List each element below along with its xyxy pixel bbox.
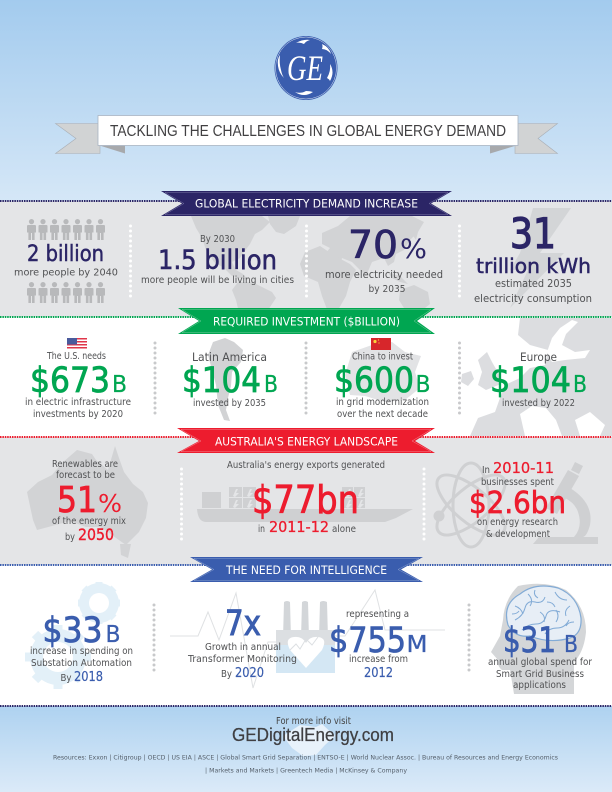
stat: 31B smart grid: annual global spend for (488, 657, 593, 668)
microscope icon (533, 462, 598, 544)
stat: Latin America 104B: B (264, 372, 278, 398)
stat: 70 percent: by 2035 (368, 284, 406, 295)
handshake icon (283, 724, 335, 756)
stat: exports 77bn: $77bn (252, 478, 359, 522)
stat: exports 77bn: alone (332, 524, 356, 535)
stat: renewables 51 percent: % (98, 489, 122, 518)
stat: 33B substation: B (106, 622, 120, 648)
stat: China 600B: B (416, 372, 430, 398)
lightning bolt (510, 208, 571, 308)
stat: China 600B: in grid modernization (336, 397, 429, 408)
section background: electricity demand (0, 201, 612, 317)
banner: Australia's energy landscape: AUSTRALIA'S ENERGY LANDSCAPE (215, 434, 398, 448)
stat: 7x transformer: 7x (225, 604, 261, 644)
stat: research 2.6bn: $2.6bn (469, 486, 566, 521)
stat: renewables 51 percent (52, 459, 126, 544)
stat: China 600B: China to invest (352, 352, 413, 362)
stat: 70 percent: 70 (348, 223, 398, 267)
stat: China 600B: $600 (334, 361, 414, 401)
stat: 31 trillion kWh: electricity consumption (474, 293, 592, 305)
banner: Australia's energy landscape (177, 428, 435, 453)
stat: 7x transformer: By (221, 669, 232, 680)
banner: the need for intelligence: THE NEED FOR INTELLIGENCE (225, 563, 387, 577)
South America map (208, 338, 243, 421)
stat: 31 trillion kWh: estimated 2035 (495, 278, 572, 290)
stat: Europe 104B: invested by 2022 (502, 398, 575, 409)
stat: 33B substation: 2018 (74, 670, 103, 685)
stat: Latin America 104B: invested by 2035 (193, 398, 266, 409)
stat: Europe 104B: $104 (490, 361, 571, 401)
stat: renewables 51 percent: by (65, 532, 75, 543)
section background: Australia (0, 437, 612, 565)
stat: 2 billion: 2 billion (27, 242, 104, 267)
Australia map (27, 446, 148, 558)
stat: 2 billion (14, 242, 118, 278)
stat: 33B substation: $33 (42, 611, 102, 651)
stat: 70 percent: % (400, 234, 427, 265)
stat: 755M: representing a (346, 609, 409, 620)
footer call to action (232, 716, 394, 745)
stat: 31B smart grid: $31 (503, 621, 556, 661)
cargo ship (197, 487, 413, 522)
stat: Europe 104B (490, 350, 587, 409)
stat: exports 77bn: Australia's energy exports generated (227, 460, 385, 471)
stat: 33B substation: Substation Automation (31, 658, 132, 669)
GE logo (274, 36, 338, 100)
stat: renewables 51 percent: forecast to be (56, 470, 115, 481)
resources: | Markets and Markets | Greentech Media | McKinsey & Company (205, 768, 407, 774)
stat: renewables 51 percent: of the energy mix (52, 516, 126, 527)
stat: research 2.6bn: 2010-11 (493, 459, 554, 477)
factory icon (276, 601, 335, 673)
banner: global electricity demand (161, 191, 452, 216)
person icons: bottom row (27, 282, 105, 303)
gears icon (25, 582, 120, 689)
section background: investment (0, 317, 612, 437)
resources (53, 754, 558, 774)
stat: Latin America 104B (182, 350, 278, 409)
stat: Latin America 104B: Latin America (192, 350, 267, 364)
stat: 755M: $755 (329, 621, 406, 661)
stat: US 673B (25, 351, 131, 420)
stat: 755M: 2012 (364, 666, 393, 681)
atom icon (428, 463, 514, 547)
resources: Resources: Exxon | Citigroup | OECD | US EIA | ASCE | Global Smart Grid Separation | ENTSO-E | World Nuclear Assoc. | Bureau of Resources and Energy Economics (53, 754, 558, 762)
stat: 31B smart grid: Smart Grid Business (496, 669, 584, 680)
stat: 1.5 billion: By 2030 (200, 234, 235, 245)
stat: 31 trillion kWh: trillion kWh (476, 254, 591, 278)
stat: 31 trillion kWh: 31 (510, 209, 556, 258)
China flag (371, 338, 391, 350)
stat: 7x transformer: Growth in annual (205, 642, 281, 653)
person icons: top row (27, 219, 105, 240)
stat: 755M: M (406, 632, 428, 658)
stat: 1.5 billion: more people will be living in cities (141, 275, 294, 286)
stat: China 600B (334, 352, 430, 420)
stat: 755M: increase from (349, 654, 408, 665)
world map (191, 216, 430, 317)
stat: 7x transformer (187, 604, 297, 681)
stat: 1.5 billion: 1.5 billion (158, 245, 277, 276)
brain and head icon (491, 584, 586, 694)
banner: required investment: REQUIRED INVESTMENT ($BILLION) (213, 314, 400, 328)
stat: 31B smart grid (488, 621, 593, 691)
stat: research 2.6bn: In (482, 465, 490, 476)
stat: research 2.6bn: & development (486, 529, 550, 540)
section background: intelligence (0, 565, 612, 706)
stat: research 2.6bn: on energy research (477, 517, 558, 528)
stat: 31B smart grid: applications (513, 680, 566, 691)
stat: research 2.6bn (469, 459, 566, 540)
stat: 2 billion: more people by 2040 (14, 268, 118, 278)
stat: US 673B: investments by 2020 (33, 409, 123, 420)
stat: US 673B: $673 (30, 361, 110, 401)
stat: 755M (329, 609, 428, 681)
stat: exports 77bn: 2011-12 (269, 518, 329, 536)
stat: Latin America 104B: $104 (182, 361, 261, 401)
stat: exports 77bn (227, 460, 385, 536)
footer background (0, 706, 612, 792)
stat: renewables 51 percent: 2050 (78, 525, 114, 544)
China map (345, 342, 421, 402)
banner: global electricity demand: GLOBAL ELECTRICITY DEMAND INCREASE (195, 196, 418, 210)
stat: Europe 104B: Europe (520, 350, 557, 364)
stat: 70 percent (325, 223, 443, 295)
stat: 33B substation: By (60, 673, 72, 684)
title ribbon: TACKLING THE CHALLENGES IN GLOBAL ENERGY DEMAND (110, 123, 506, 140)
Europe map (461, 318, 612, 436)
footer call to action: For more info visit (276, 716, 351, 727)
stat: 7x transformer: Transformer Monitoring (187, 654, 297, 665)
stat: China 600B: over the next decade (337, 409, 428, 420)
title ribbon (56, 116, 558, 154)
GE logo: GE (287, 48, 323, 88)
stat: 33B substation (30, 611, 133, 685)
banner: required investment (178, 308, 435, 334)
stat: US 673B: B (112, 372, 127, 398)
sky background (0, 0, 612, 201)
stat: 1.5 billion (141, 234, 294, 286)
stat: 31 trillion kWh (474, 209, 592, 305)
stat: exports 77bn: in (258, 524, 265, 535)
banner: the need for intelligence (190, 557, 423, 582)
stat: Europe 104B: B (573, 372, 587, 398)
stat: 70 percent: more electricity needed (325, 269, 443, 281)
US flag (67, 338, 87, 350)
stat: 33B substation: increase in spending on (30, 646, 133, 657)
stat: 7x transformer: 2020 (235, 666, 264, 681)
stat: 31B smart grid: B (564, 632, 578, 658)
stat: renewables 51 percent: 51 (57, 480, 97, 521)
footer call to action: GEDigitalEnergy.com (232, 725, 394, 745)
stat: research 2.6bn: businesses spent (481, 477, 554, 488)
stat: US 673B: in electric infrastructure (25, 397, 131, 408)
heartbeat line (170, 590, 445, 688)
stat: renewables 51 percent: Renewables are (52, 459, 118, 470)
stat: US 673B: The U.S. needs (46, 351, 106, 362)
